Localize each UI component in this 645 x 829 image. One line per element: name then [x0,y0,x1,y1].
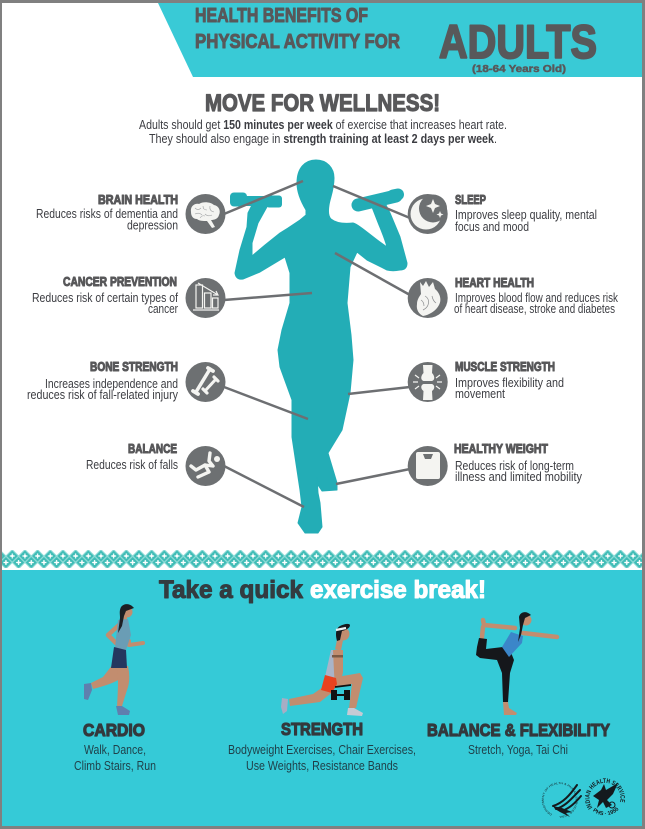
benefit: sleep: Improves sleep quality, mental [455,208,597,222]
benefit: brain health [36,193,226,234]
title: HEALTH BENEFITS OF [195,5,368,27]
icon: bathroom scale [408,446,448,486]
benefit: sleep [408,193,597,234]
benefit: healthy weight: Reduces risk of long-term [455,459,574,473]
benefit: brain health: Reduces risks of dementia and [36,207,178,221]
benefit: heart health [408,276,619,318]
label: strength: Use Weights, Resistance Bands [246,758,398,773]
label: balance and flexibility: Stretch, Yoga, Tai Chi [468,742,568,757]
benefit: healthy weight: HEALTHY WEIGHT [454,442,548,456]
intro text: Adults should get 150 minutes per week of exercise that increases heart rate. [139,117,507,132]
label: cardio [74,720,156,773]
icon: knee joint [408,362,448,402]
heading: move for wellness: MOVE FOR WELLNESS! [205,90,440,117]
silhouette with dumbbells [230,160,407,533]
benefit: balance: Reduces risk of falls [86,458,178,472]
benefit: sleep: SLEEP [455,193,486,207]
icon: declining bar chart [186,278,226,318]
illustration: runner [84,604,143,715]
heading: take a quick exercise break: exercise break! [310,576,486,604]
label: cardio: CARDIO [83,720,145,740]
intro text [139,117,507,146]
benefit: heart health: HEART HEALTH [455,276,534,290]
intro text: They should also engage in strength training at least 2 days per week. [149,131,497,146]
title [195,5,400,53]
benefit: healthy weight [408,442,583,486]
benefit: muscle strength [408,360,564,402]
icon: brain [186,194,226,234]
benefit: healthy weight: illness and limited mobility [455,470,583,484]
label: balance and flexibility [427,720,610,757]
benefit: brain health: depression [127,218,178,232]
benefit: brain health: BRAIN HEALTH [98,193,178,207]
label: strength [228,719,416,773]
icon: anatomical heart [408,278,448,318]
illustration: lunge with dumbbell [281,624,363,716]
benefit: muscle strength: Improves flexibility and [455,376,564,390]
benefit: cancer prevention: Reduces risk of certain types of [32,291,178,305]
title: PHYSICAL ACTIVITY FOR [195,31,400,53]
heading: take a quick exercise break: Take a quick [159,576,303,604]
benefit: balance: BALANCE [128,442,177,456]
benefit: cancer prevention: cancer [148,302,178,316]
logo: health and human services: DEPARTMENT OF HEALTH & HUMAN SERVICES · USA [542,782,578,818]
benefit: muscle strength: movement [455,387,505,401]
label: strength: Bodyweight Exercises, Chair Exercises, [228,742,416,757]
benefit: muscle strength: MUSCLE STRENGTH [455,360,555,374]
label: cardio: Walk, Dance, [84,742,146,757]
label: strength: STRENGTH [281,719,363,739]
benefit: bone strength: BONE STRENGTH [90,360,178,374]
illustration: dancer yoga pose [476,612,557,715]
connector lines [224,181,410,507]
icon: moon and stars [408,194,448,234]
decorative band [2,550,642,568]
label: balance and flexibility: BALANCE & FLEXIBILITY [427,720,610,740]
benefit: balance [86,442,226,486]
benefit: cancer prevention [32,275,226,318]
age range: (18-64 Years Old) [472,63,566,75]
header banner [158,3,642,77]
benefit: cancer prevention: CANCER PREVENTION [63,275,177,289]
panel: exercise break [2,570,642,826]
icon: bones [186,362,226,402]
benefit: sleep: focus and mood [455,220,529,234]
label: cardio: Climb Stairs, Run [74,758,156,773]
icon: falling person [186,446,226,486]
benefit: bone strength [27,360,226,402]
heading: take a quick exercise break [159,576,486,604]
logo: indian health service: INDIAN HEALTH SERVICE [585,778,625,810]
logo: indian health service: PHS · 1955 [593,806,618,816]
benefit: bone strength: reduces risk of fall-related injury [27,388,179,402]
title: adults: ADULTS [439,16,597,69]
benefit: bone strength: Increases independence and [45,377,178,391]
